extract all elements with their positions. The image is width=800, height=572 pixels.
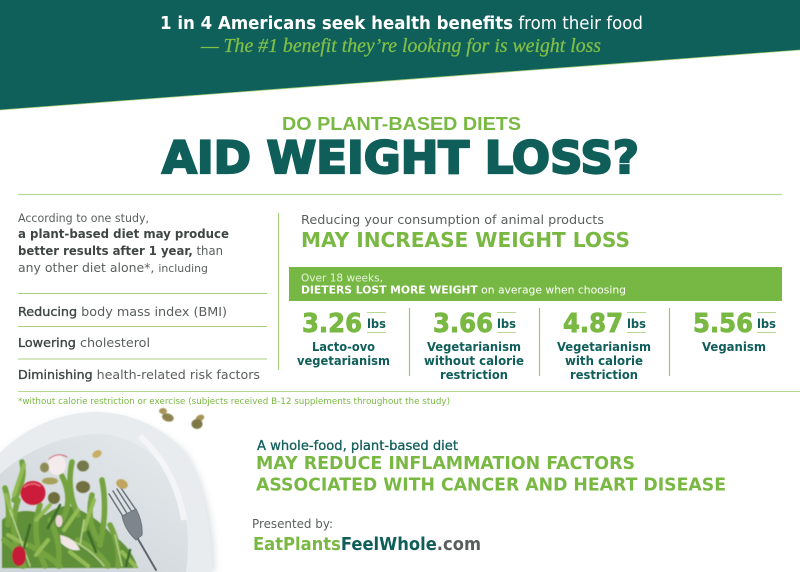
stat: veganism: 5.56 — [693, 309, 753, 339]
presented by: EatPlantsFeelWhole.com — [253, 534, 481, 555]
stat: vegetarianism with calorie restriction: with calorie — [565, 353, 643, 368]
stat: vegetarianism with calorie restriction: 4.87 — [563, 309, 623, 339]
stat: lacto-ovo: Lacto-ovo — [312, 339, 375, 354]
stat: vegetarianism without calorie restriction: lbs — [497, 316, 516, 331]
stat: lacto-ovo — [297, 309, 390, 368]
stat: veganism — [693, 309, 776, 354]
presented by: Presented by: — [252, 517, 333, 531]
panel: study summary: a plant-based diet may produce — [18, 226, 229, 241]
footnote: *without calorie restriction or exercise (subjects received B-12 supplements throughout the study) — [18, 397, 450, 407]
callout: inflammation — [256, 439, 726, 496]
stat: lacto-ovo: vegetarianism — [297, 353, 390, 368]
stat: vegetarianism with calorie restriction: restriction — [570, 367, 638, 382]
heading: animal products: Reducing your consumption of animal products — [301, 212, 604, 227]
title: DO PLANT-BASED DIETS — [282, 114, 521, 134]
stat: vegetarianism without calorie restriction — [424, 309, 524, 382]
presented by — [252, 517, 481, 555]
pumpkin seeds — [40, 408, 205, 504]
panel: study summary — [18, 211, 229, 275]
title: AID WEIGHT LOSS? — [162, 133, 639, 184]
panel: benefits list: Diminishing health-related risk factors — [18, 367, 260, 382]
panel: study summary: any other diet alone*, including — [18, 261, 208, 275]
callout: inflammation: MAY REDUCE INFLAMMATION FACTORS — [256, 454, 635, 474]
callout: inflammation: ASSOCIATED WITH CANCER AND HEART DISEASE — [256, 476, 726, 496]
fork — [109, 488, 156, 570]
stat: veganism: Veganism — [702, 339, 766, 354]
panel: study summary: According to one study, — [18, 211, 149, 225]
header text: 1 in 4 Americans seek health benefits from their food — [160, 13, 643, 34]
green banner: DIETERS LOST MORE WEIGHT on average when choosing — [301, 284, 626, 296]
stat: lacto-ovo: lbs — [367, 316, 386, 331]
header banner — [0, 0, 800, 110]
stat: veganism: lbs — [757, 316, 776, 331]
stat: vegetarianism without calorie restriction: Vegetarianism — [427, 339, 521, 354]
salad — [2, 455, 138, 568]
stat: vegetarianism without calorie restriction: 3.66 — [433, 309, 493, 339]
stat: vegetarianism with calorie restriction — [557, 309, 651, 382]
panel: study summary: better results after 1 year, than — [18, 243, 223, 258]
heading: animal products — [301, 212, 630, 252]
stat: vegetarianism without calorie restriction: restriction — [440, 367, 508, 382]
panel: benefits list: Reducing body mass index (BMI) — [18, 304, 227, 319]
green banner — [289, 267, 782, 301]
panel: benefits list: Lowering cholesterol — [18, 335, 150, 350]
stat: vegetarianism with calorie restriction: lbs — [627, 316, 646, 331]
callout: inflammation: A whole-food, plant-based diet — [257, 439, 458, 454]
illustration: plate with salad — [0, 408, 215, 572]
header text — [160, 13, 643, 57]
green banner: Over 18 weeks, — [301, 272, 383, 284]
stat: vegetarianism without calorie restriction: without calorie — [424, 353, 524, 368]
header text: — The #1 benefit they’re looking for is weight loss — [200, 35, 601, 57]
stat: lacto-ovo: 3.26 — [302, 309, 362, 339]
stat: vegetarianism with calorie restriction: Vegetarianism — [557, 339, 651, 354]
panel: benefits list — [18, 294, 267, 382]
heading: animal products: MAY INCREASE WEIGHT LOSS — [301, 228, 630, 252]
